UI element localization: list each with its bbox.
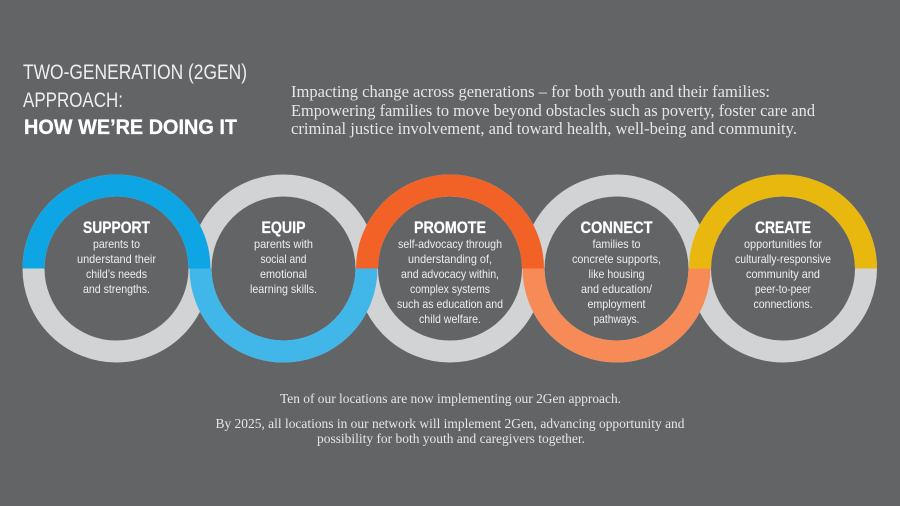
- intro paragraph: [291, 82, 816, 138]
- ring text: connect: like housing: [588, 267, 644, 281]
- closing statement: [216, 391, 685, 446]
- ring text: promote: self-advocacy through: [398, 237, 502, 251]
- ring arc: support: [34, 186, 200, 268]
- ring text: promote: PROMOTE: [414, 218, 486, 237]
- ring text: support: parents to: [93, 237, 140, 251]
- ring arc: promote: [367, 185, 533, 268]
- ring text: equip: emotional: [260, 267, 307, 281]
- ring text: support: SUPPORT: [83, 218, 150, 237]
- ring text: create: connections.: [754, 297, 812, 311]
- ring text: support: child’s needs: [86, 267, 147, 281]
- ring text: support: [77, 218, 156, 296]
- ring text: create: [735, 218, 831, 311]
- title: HOW WE’RE DOING IT: [24, 115, 237, 139]
- ring text: promote: understanding of,: [408, 252, 492, 266]
- ring text: support: understand their: [77, 252, 156, 266]
- closing statement: possibility for both youth and caregivers together.: [317, 431, 585, 446]
- ring text: equip: learning skills.: [250, 282, 317, 296]
- linked ring chain: [34, 185, 866, 352]
- ring text: connect: families to: [592, 237, 641, 251]
- intro paragraph: criminal justice involvement, and toward health, well-being and community.: [291, 119, 797, 138]
- ring text: support: and strengths.: [83, 282, 150, 296]
- ring text: create: culturally-responsive: [735, 252, 831, 266]
- ring arc: equip: [200, 268, 366, 351]
- ring text: connect: concrete supports,: [572, 252, 661, 266]
- ring text: promote: [397, 218, 503, 326]
- ring text: connect: [572, 218, 661, 326]
- intro paragraph: Impacting change across generations – for both youth and their families:: [291, 82, 770, 101]
- title: APPROACH:: [23, 88, 123, 112]
- intro paragraph: Empowering families to move beyond obstacles such as poverty, foster care and: [291, 101, 816, 120]
- ring text: create: opportunities for: [744, 237, 822, 251]
- ring arc: create: [700, 185, 866, 268]
- ring text: connect: CONNECT: [580, 218, 653, 237]
- ring text: connect: employment: [588, 297, 646, 311]
- ring text: promote: and advocacy within,: [401, 267, 499, 281]
- gray base rings: [34, 186, 866, 352]
- ring text: create: community and: [746, 267, 820, 281]
- closing statement: Ten of our locations are now implementing our 2Gen approach.: [280, 391, 621, 406]
- closing statement: By 2025, all locations in our network will implement 2Gen, advancing opportunity and: [216, 416, 685, 431]
- ring text: promote: complex systems: [410, 282, 490, 296]
- ring arc: connect: [534, 268, 700, 352]
- ring text: create: peer-to-peer: [755, 282, 811, 296]
- ring text: equip: EQUIP: [262, 218, 306, 237]
- ring text: equip: [250, 218, 317, 296]
- ring text: equip: parents with: [254, 237, 313, 251]
- ring text: promote: such as education and: [397, 297, 503, 311]
- ring text: connect: and education/: [581, 282, 653, 296]
- ring text: connect: pathways.: [594, 312, 640, 326]
- ring text: promote: child welfare.: [419, 312, 481, 326]
- ring text: create: CREATE: [755, 218, 811, 237]
- title: TWO-GENERATION (2GEN): [23, 60, 247, 84]
- title: [23, 60, 247, 139]
- ring text: equip: social and: [260, 252, 306, 266]
